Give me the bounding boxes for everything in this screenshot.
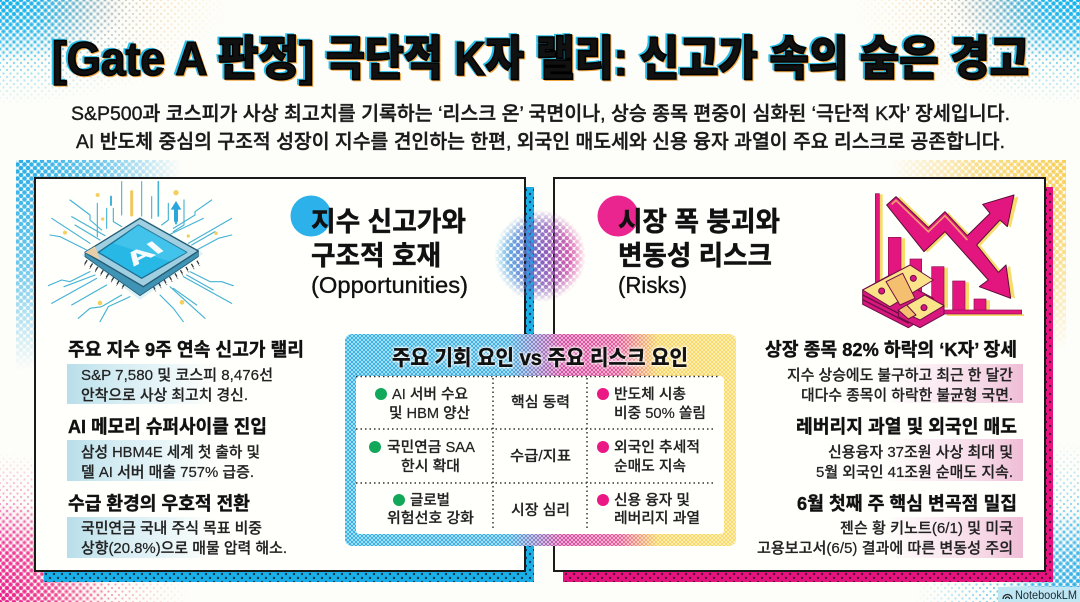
panel frame: risks	[554, 178, 1045, 571]
title: 신고가 속의 숨은 경고	[640, 32, 1029, 85]
row: market sentiment: 글로벌	[410, 492, 450, 509]
panel shadow: magenta	[563, 187, 1053, 582]
panel: comparison table	[345, 334, 736, 546]
text block: AI memory: 델 AI 서버 매출 757% 급증.	[81, 464, 254, 481]
text block: K-shape decline: 대다수 종목이 하락한 불균형 국면.	[801, 387, 1013, 404]
halftone: behind right panel	[898, 160, 1066, 343]
text block: June events: 젠슨 황 키노트(6/1) 및 미국	[840, 520, 1013, 537]
panel: opportunities	[35, 178, 534, 582]
row: market sentiment: 위험선호 강화	[387, 510, 474, 527]
row: core drivers	[375, 386, 706, 422]
halftone: bottom-left corner	[0, 450, 190, 602]
text block: leverage: 레버리지 과열 및 외국인 매도	[796, 416, 1017, 437]
row: supply and demand: 국민연금 SAA	[387, 439, 475, 456]
row: market sentiment: 시장 심리	[511, 502, 570, 519]
text block: leverage: 신용융자 37조원 사상 최대 및	[828, 444, 1013, 461]
row: market sentiment: 레버리지 과열	[614, 510, 700, 527]
halftone: top-left corner	[0, 0, 221, 102]
text block: supply and demand: 수급 환경의 우호적 전환	[68, 493, 250, 514]
comparison frame	[345, 334, 736, 546]
title: 극단적 K자 랠리:	[326, 32, 628, 85]
title	[52, 32, 1029, 85]
heading: risks	[598, 196, 780, 298]
text block: leverage: 5월 외국인 41조원 순매도 지속.	[816, 464, 1013, 481]
panel: risks	[554, 178, 1053, 582]
title: [Gate A 판정]	[52, 32, 314, 85]
intro paragraph	[71, 103, 1010, 153]
heading: opportunities: (Opportunities)	[311, 272, 468, 298]
text block: index rally: 주요 지수 9주 연속 신고가 랠리	[68, 339, 304, 360]
text block: supply and demand: 상향(20.8%)으로 매물 압력 해소.	[81, 540, 287, 557]
halftone: behind left panel	[16, 160, 176, 364]
heading: risks: 시장 폭 붕괴와	[618, 207, 780, 237]
panel shadow: blue	[44, 187, 534, 582]
row: core drivers: AI 서버 수요	[392, 386, 468, 403]
row: supply and demand: 순매도 지속	[614, 458, 686, 475]
halftone: top-right corner	[860, 0, 1080, 102]
heading: risks: 변동성 리스크	[618, 241, 772, 271]
row: core drivers: 핵심 동력	[511, 394, 570, 411]
halftone: center burst	[494, 211, 585, 301]
heading: opportunities: 구조적 호재	[311, 241, 441, 271]
row: core drivers: 반도체 시총	[614, 386, 686, 403]
intro paragraph: S&P500과 코스피가 사상 최고치를 기록하는 ‘리스크 온’ 국면이나, 상승 종목 편중이 심화된 ‘극단적 K자’ 장세입니다.	[71, 103, 1010, 125]
text block: index rally: 안착으로 사상 최고치 경신.	[81, 387, 248, 404]
halftone: bottom-right corner	[915, 440, 1080, 602]
icon: AI chip with circuits: AI	[119, 238, 169, 270]
text block: index rally	[67, 339, 304, 404]
row: supply and demand: 외국인 추세적	[614, 439, 700, 456]
comparison table body	[356, 376, 724, 534]
heading: opportunities: 지수 신고가와	[311, 207, 466, 237]
text block: K-shape decline	[765, 339, 1023, 404]
heading: opportunities	[290, 196, 468, 298]
text block: supply and demand: 국민연금 국내 주식 목표 비중	[81, 520, 262, 537]
row: market sentiment: 신용 융자 및	[614, 492, 690, 509]
text block: supply and demand	[67, 493, 287, 558]
panel frame: opportunities	[35, 178, 525, 571]
row: market sentiment	[387, 492, 700, 527]
row: core drivers: 비중 50% 쏠림	[614, 405, 706, 422]
icon: magenta heading circle	[598, 196, 638, 236]
intro paragraph: AI 반도체 중심의 구조적 성장이 지수를 견인하는 한편, 외국인 매도세와 신용 융자 과열이 주요 리스크로 공존합니다.	[76, 131, 1005, 153]
text block: K-shape decline: 상장 종목 82% 하락의 ‘K자’ 장세	[765, 339, 1017, 360]
text block: June events: 고용보고서(6/5) 결과에 따른 변동성 주의	[757, 540, 1013, 557]
icon: falling chart with money	[863, 194, 1024, 328]
icon: blue heading circle	[290, 196, 332, 236]
text block: AI memory	[67, 416, 267, 481]
row: supply and demand	[369, 439, 700, 475]
icon: AI chip with circuits	[48, 182, 233, 322]
text block: June events	[757, 493, 1023, 558]
row: core drivers: 및 HBM 양산	[389, 405, 470, 422]
text block: AI memory: 삼성 HBM4E 세계 첫 출하 및	[81, 444, 260, 461]
text block: leverage	[796, 416, 1023, 481]
text block: index rally: S&P 7,580 및 코스피 8,476선	[81, 367, 273, 384]
text block: K-shape decline: 지수 상승에도 불구하고 최근 한 달간	[787, 367, 1013, 384]
comparison heading: 주요 기회 요인 vs 주요 리스크 요인	[392, 347, 688, 370]
text block: AI memory: AI 메모리 슈퍼사이클 진입	[68, 416, 267, 437]
text block: June events: 6월 첫째 주 핵심 변곡점 밀집	[797, 493, 1017, 514]
row: supply and demand: 수급/지표	[510, 448, 571, 465]
row: supply and demand: 한시 확대	[401, 458, 460, 475]
heading: risks: (Risks)	[618, 272, 687, 298]
